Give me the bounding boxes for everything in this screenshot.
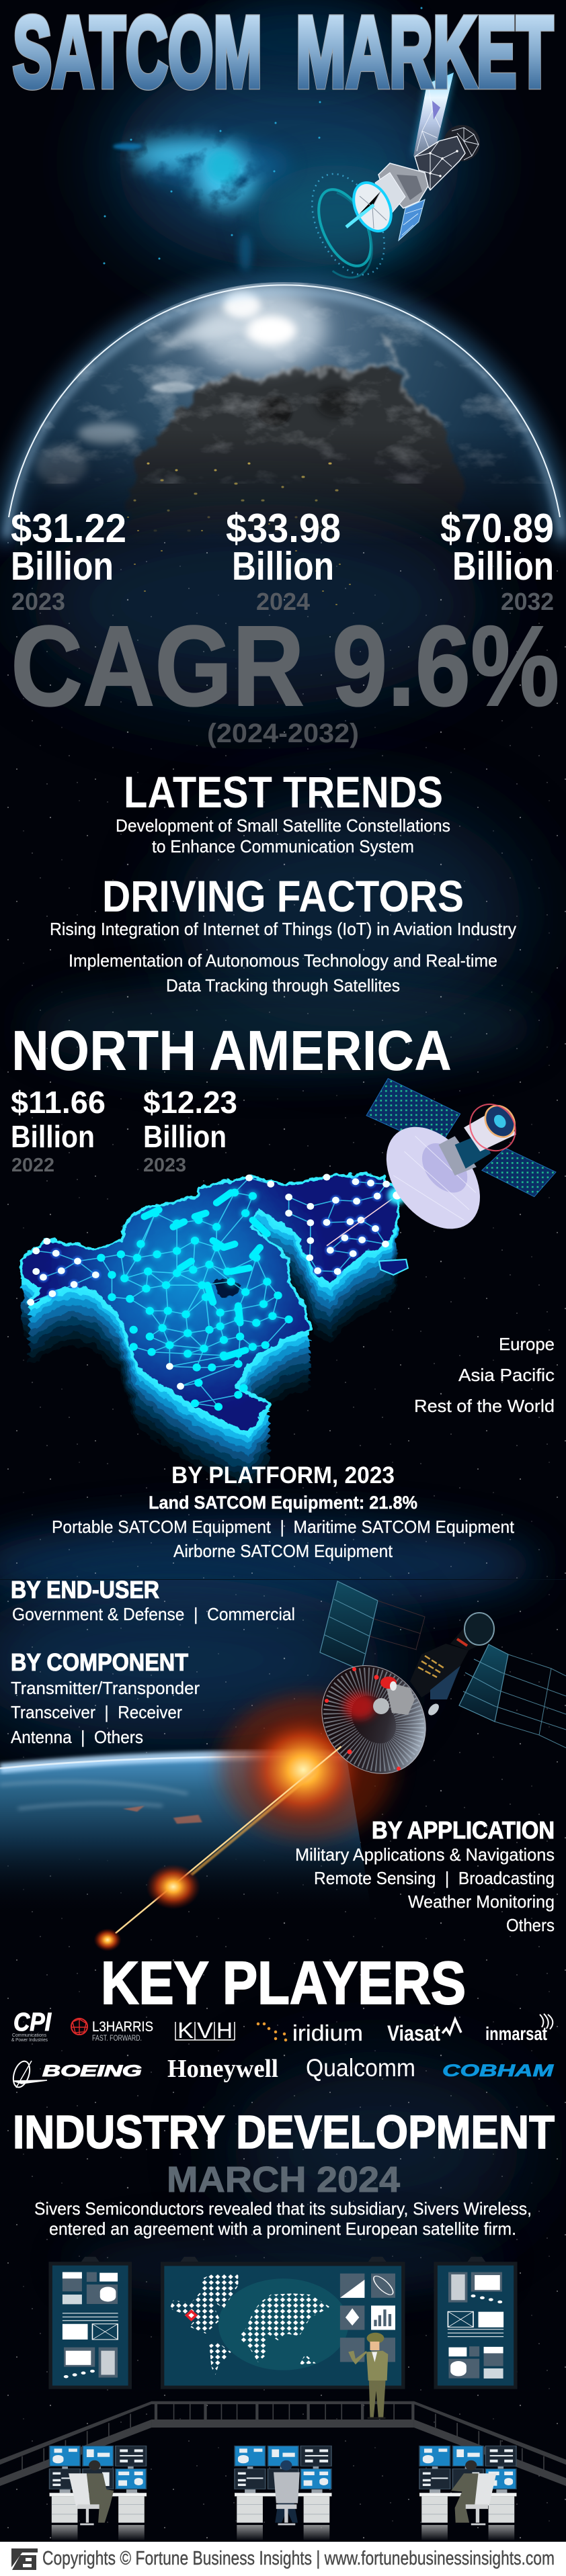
by application: Others [506,1915,555,1935]
sun glare [192,290,326,368]
stat: 2023 [11,506,126,615]
stat: 2024: Billion [232,544,334,588]
stat: NA 2023: $12.23 [143,1085,237,1120]
control room scene [0,2257,566,2541]
regions list: Europe [499,1334,555,1354]
logo: Viasat: Viasat [387,2021,440,2045]
footer [0,2542,566,2576]
stat: 2023: $31.22 [11,506,126,551]
stat: NA 2022: 2022 [11,1155,54,1176]
regions list: Rest of the World [414,1396,555,1416]
driving factors: DRIVING FACTORS [102,871,464,921]
by platform: Land SATCOM Equipment: 21.8% [149,1493,417,1513]
screen: center world map [161,2257,405,2389]
stat: 2032: 2032 [501,588,554,615]
small antenna disc [426,1701,441,1718]
logo: CPI: Communications [12,2032,46,2038]
solar panel upper: dark half [370,1601,425,1650]
stat: NA 2023: 2023 [143,1155,186,1176]
officer [348,2333,388,2419]
by platform: BY PLATFORM, 2023 [171,1462,395,1489]
dark lake [257,396,292,426]
logo: Boeing [10,2059,142,2089]
land mass [123,371,471,537]
dish [300,1645,447,1794]
hudson bay [213,1277,242,1297]
logo: KVH: K [177,2018,194,2043]
stat: NA 2022: Billion [11,1119,95,1154]
logo: iridium: iridium [292,2020,363,2045]
by component [11,1648,200,1747]
logo: Honeywell: Honeywell [167,2055,278,2083]
by platform: Portable SATCOM Equipment | Maritime SATCOM Equipment [52,1517,515,1537]
earth globe [0,263,566,605]
body [438,1136,477,1175]
stat: 2032: $70.89 [440,506,554,551]
logo: iridium [258,2020,363,2045]
development text: entered an agreement with a prominent European satellite firm. [49,2219,516,2239]
city lights [134,463,337,537]
by platform [52,1462,515,1561]
logo: Qualcomm: Qualcomm [306,2054,415,2082]
divider line [0,1579,566,1580]
lights trailing below earth [128,517,350,605]
logo: L3Harris: L3HARRIS [92,2019,153,2035]
fireball mid [146,1864,200,1909]
by application: Military Applications & Navigations [295,1845,555,1865]
driving factors [50,871,516,995]
dish [346,177,399,237]
by application: Weather Monitoring [408,1892,555,1912]
latest trends: Development of Small Satellite Constellations [116,815,450,836]
map surface [22,1173,397,1433]
regions list: Asia Pacific [458,1365,555,1385]
stat: NA 2023 [143,1085,237,1176]
latest trends: to Enhance Communication System [152,836,414,856]
by end-user: BY END-USER [11,1576,159,1603]
development text [34,2199,532,2239]
date: MARCH 2024 [167,2160,400,2200]
logo: inmarsat: inmarsat [485,2023,547,2044]
satellite: laser dish [300,1581,566,1794]
by end-user: Government & Defense | Commercial [12,1604,295,1624]
map: north america [22,1173,408,1491]
land ridge [202,363,393,390]
by component: Transmitter/Transponder [11,1678,200,1698]
logo: CPI: CPI [13,2008,52,2037]
stat: 2023: Billion [11,544,114,588]
regions list [414,1334,555,1416]
by application: Remote Sensing | Broadcasting [314,1868,555,1888]
satellite: top [294,73,480,288]
glowing nodes [101,1193,289,1407]
footer logo [11,2548,38,2570]
white nodes [31,1178,387,1386]
logo: L3Harris [71,2018,153,2043]
body mesh [415,136,465,190]
logo: Boeing: BOEING [42,2062,142,2080]
solar panel upper [413,73,454,157]
network mesh [31,1178,387,1407]
driving factors: Implementation of Autonomous Technology and Real-time [69,950,497,971]
by component: Transceiver | Receiver [11,1702,182,1722]
signal rings [294,163,399,288]
console: center [235,2446,332,2541]
north america heading: NORTH AMERICA [11,1019,452,1082]
latest trends [116,767,450,856]
world map dots [169,2274,330,2377]
balcony railing [0,2401,566,2486]
fireball tip [94,1928,121,1951]
console: right [419,2446,516,2541]
laser beam [94,1746,341,1951]
solar panel left [366,1079,460,1148]
latest trends: LATEST TRENDS [124,767,443,817]
front ring [375,173,405,213]
by end-user [11,1576,295,1624]
lens barrel [450,1626,482,1650]
hub [373,1698,389,1714]
stat: 2024: $33.98 [226,506,341,551]
island [379,1259,408,1275]
stat: 2024: 2024 [256,588,310,615]
node glow [124,1193,272,1356]
solar panel lower: dark half [495,1654,566,1748]
stat: NA 2022 [11,1085,106,1176]
logo: KVH: H [216,2018,233,2043]
body [410,1644,469,1697]
signal beam [327,1196,397,1246]
stat: 2032 [440,506,554,615]
satellite: north america [366,1079,556,1245]
CAGR period: (2024-2032) [207,719,359,748]
cyan glow [413,73,454,157]
solar panel lower: lit half [459,1644,508,1722]
stat: 2024 [226,506,341,615]
orange glow [220,1695,393,1838]
console: left [50,2446,147,2541]
scene: earth horizon and laser [0,1695,393,1914]
earth horizon [0,1755,372,1914]
elongated node clusters [145,1193,267,1357]
logo: inmarsat [485,2014,553,2044]
logo: CPI: & Power Industries [11,2037,48,2043]
by platform: Airborne SATCOM Equipment [173,1541,393,1561]
logo: Cobham: COBHAM [442,2061,555,2080]
dish [367,1110,499,1245]
driving factors: Rising Integration of Internet of Things (IoT) in Aviation Industry [50,919,516,939]
stat: NA 2023: Billion [143,1119,227,1154]
by component: Antenna | Others [11,1727,143,1747]
screen: right [434,2257,518,2389]
rear sphere [444,125,480,161]
logo: KVH [175,2018,235,2043]
key players heading: KEY PLAYERS [101,1950,466,2017]
solar panel right [482,1148,556,1197]
stat: NA 2022: $11.66 [11,1085,106,1120]
cloud patches [78,423,138,444]
driving factors: Data Tracking through Satellites [166,975,400,995]
cylinder [378,163,428,208]
white node halos [43,1182,377,1294]
logo: L3Harris: FAST. FORWARD. [92,2033,142,2043]
by application [295,1816,555,1935]
logo: KVH: V [197,2018,213,2043]
extruded base [22,1173,397,1491]
by component: BY COMPONENT [11,1648,188,1676]
solar panel upper: lit half [320,1581,378,1671]
development text: Sivers Semiconductors revealed that its subsidiary, Sivers Wireless, [34,2199,532,2219]
dashboard tiles [340,2274,395,2362]
solar panel lower [399,199,425,240]
rim light [7,292,562,537]
stat: 2023: 2023 [11,588,65,615]
screen: left [48,2257,132,2389]
